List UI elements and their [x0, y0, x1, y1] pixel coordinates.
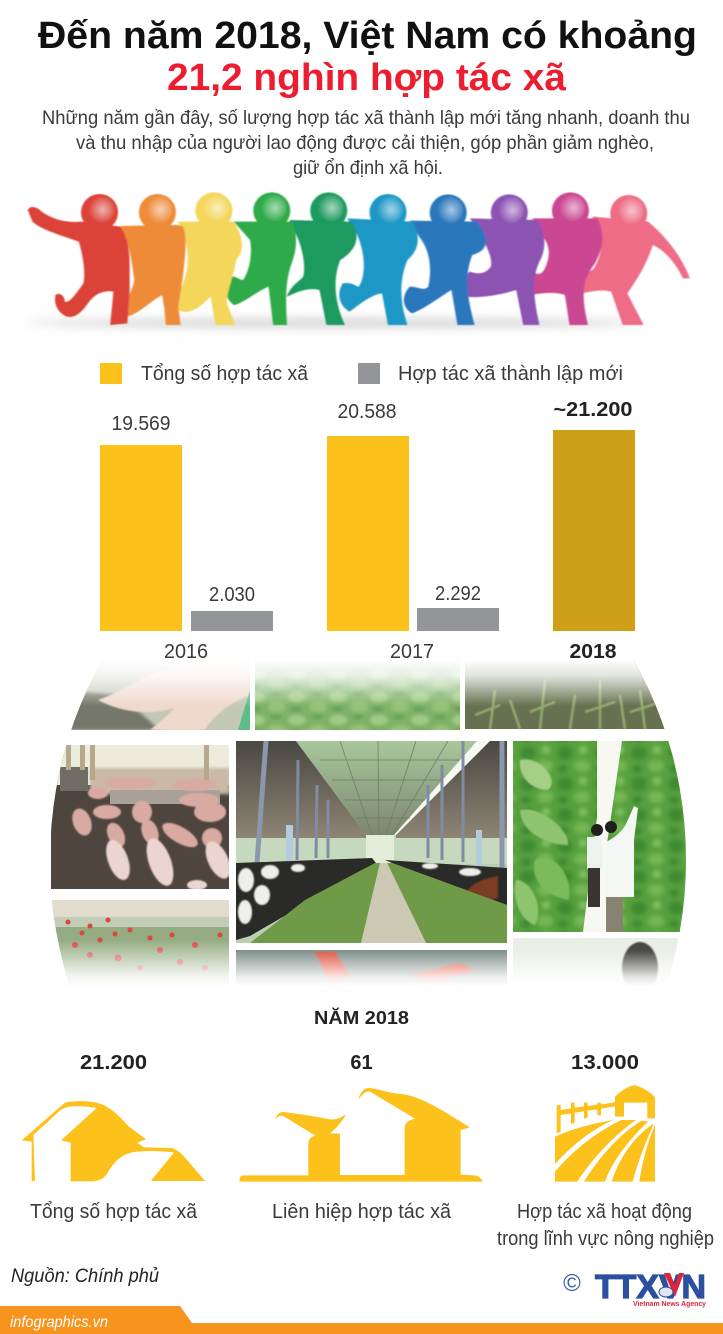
icon: two houses	[239, 1088, 483, 1182]
bars 2017: 20.588	[338, 401, 396, 423]
logo: TTXVN copyright: Vietnam News Agency	[633, 1299, 707, 1308]
bar 2018	[553, 399, 635, 663]
title	[38, 15, 697, 99]
bars 2016: 2016	[164, 641, 208, 663]
figure: orange	[113, 194, 186, 325]
stat: cooperative unions: 61	[350, 1052, 373, 1074]
figure: teal green	[287, 192, 357, 325]
stat: agricultural cooperatives	[497, 1052, 714, 1250]
bars 2017: 2017	[390, 641, 434, 663]
intro text	[42, 107, 690, 179]
bars 2017: 2.292	[435, 583, 481, 605]
icon: house	[22, 1101, 205, 1181]
figure: cyan	[339, 194, 418, 325]
intro text: Những năm gần đây, số lượng hợp tác xã thành lập mới tăng nhanh, doanh thu	[42, 107, 690, 129]
stat: cooperative unions: Liên hiệp hợp tác xã	[272, 1201, 452, 1223]
figure: green	[225, 192, 296, 325]
footer band: infographics.vn	[10, 1314, 108, 1331]
figure: red	[28, 194, 130, 325]
bars 2016: 2.030	[209, 584, 255, 606]
logo: TTXVN copyright: ©	[563, 1270, 581, 1297]
photo: greenhouse vines and workers	[513, 741, 686, 932]
illustration: row of clay figures	[25, 192, 690, 327]
stat: total cooperatives	[22, 1052, 205, 1223]
title: Đến năm 2018, Việt Nam có khoảng	[38, 15, 697, 57]
photo: green crop rows	[255, 664, 460, 730]
stat: agricultural cooperatives: Hợp tác xã hoạt động	[517, 1201, 692, 1223]
photo: flower field	[50, 900, 229, 986]
footer band	[0, 1306, 723, 1334]
photo: pig farm	[51, 745, 236, 890]
figure: purple	[463, 194, 544, 325]
bars 2016: 19.569	[112, 413, 170, 435]
chart legend: Tổng số hợp tác xã	[141, 363, 309, 385]
photo collage	[50, 650, 696, 994]
logo: TTXVN copyright: TTXVN	[595, 1268, 706, 1305]
logo: TTXVN copyright	[563, 1268, 707, 1308]
title: 21,2 nghìn hợp tác xã	[167, 57, 567, 99]
source note: Nguồn: Chính phủ	[11, 1266, 159, 1287]
bar 2018: 2018	[570, 641, 616, 663]
bar chart	[100, 399, 635, 663]
icon: farm field and barn	[555, 1085, 655, 1182]
stat: total cooperatives: 21.200	[80, 1052, 147, 1074]
photo: red flowers close-up	[236, 950, 507, 986]
intro text: và thu nhập của người lao động được cải thiện, góp phần giảm nghèo,	[76, 132, 654, 154]
photo: dairy cow barn	[236, 741, 507, 943]
stat: total cooperatives: Tổng số hợp tác xã	[30, 1201, 198, 1223]
photo: greenhouse tunnel	[513, 938, 678, 984]
section heading: year 2018: NĂM 2018	[314, 1007, 409, 1028]
stat: cooperative unions	[239, 1052, 483, 1223]
figure: magenta	[516, 192, 602, 325]
bars 2016	[100, 413, 273, 663]
intro text: giữ ổn định xã hội.	[293, 157, 443, 179]
chart legend: Hợp tác xã thành lập mới	[398, 363, 623, 385]
photo: orchid rows	[465, 660, 675, 729]
figure: yellow	[162, 192, 242, 325]
stat: agricultural cooperatives: 13.000	[571, 1052, 639, 1074]
bars 2017	[327, 401, 499, 663]
figure: pink	[574, 195, 690, 325]
photo: hand in seedlings	[60, 660, 250, 730]
figure: blue	[404, 194, 486, 325]
chart legend	[100, 363, 623, 385]
bar 2018: ~21.200	[554, 399, 632, 421]
